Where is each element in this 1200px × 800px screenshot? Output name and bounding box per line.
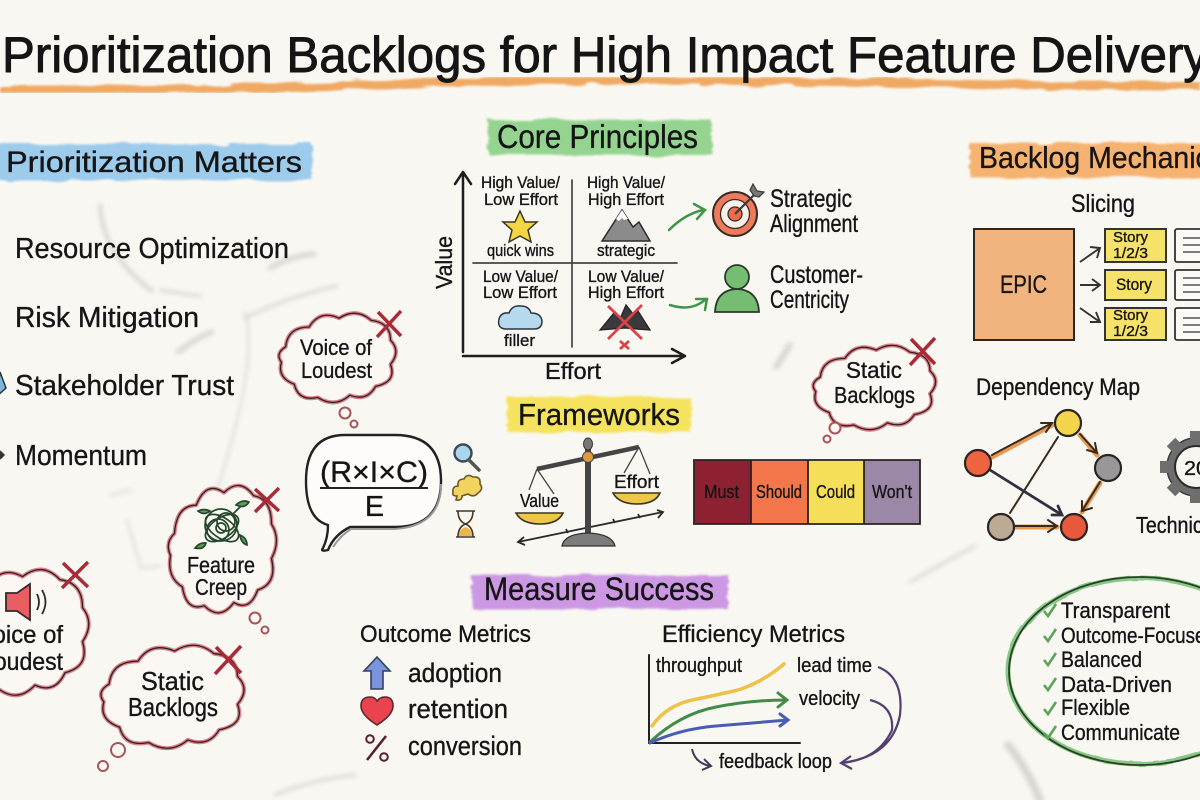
heading: prioritization matters: Prioritization Matters [6, 146, 302, 179]
icon: hourglass [456, 511, 475, 537]
list item: stakeholder trust: Stakeholder Trust [15, 370, 234, 402]
panel: core principles [431, 118, 863, 384]
diagram: slicing: 1/2/3 [1113, 245, 1148, 262]
panel: measure success [360, 571, 901, 773]
anti-pattern cloud: static backlogs, bottom: Backlogs [128, 692, 218, 722]
quadrant: filler: filler [504, 331, 535, 350]
icon: target [713, 184, 764, 236]
quadrant: strategic [587, 173, 665, 260]
formula bubble: rice: E [365, 491, 384, 523]
block: efficiency metrics: feedback loop [719, 751, 832, 773]
anti-pattern cloud: voice of loudest, top: Loudest [301, 358, 372, 383]
diagram: dependency map: Dependency Map [976, 374, 1140, 401]
panel: why prioritization matters [0, 144, 312, 472]
list item: resource optimization: Resource Optimization [15, 233, 289, 265]
chart: moscow bar: Won't [872, 482, 912, 502]
block: outcome metrics: Outcome Metrics [360, 621, 531, 648]
callout: healthy backlog checklist: Data-Driven [1061, 672, 1172, 697]
icon: technical debt gear [1136, 431, 1200, 538]
diagram: slicing: EPIC [1000, 271, 1047, 299]
block: efficiency metrics: lead time [797, 655, 872, 677]
quadrant: filler: Low Value/ [483, 267, 558, 286]
quadrant: quick wins: quick wins [487, 241, 554, 260]
quadrant: strategic: strategic [597, 241, 655, 260]
panel: frameworks [306, 397, 920, 551]
diagram: slicing: Slicing [1071, 190, 1135, 218]
block: outcome metrics [360, 621, 531, 761]
block: efficiency metrics: velocity [799, 688, 860, 710]
arrow: to customer centricity [670, 299, 707, 310]
block: outcome metrics: adoption [408, 658, 502, 688]
heading: frameworks: Frameworks [518, 397, 680, 432]
block: outcome metrics: retention [408, 694, 508, 724]
formula bubble: rice [306, 435, 441, 551]
anti-pattern cloud: static backlogs, top right [813, 338, 936, 442]
chart: moscow bar: Must [704, 482, 739, 502]
diagram: slicing: Story [1116, 275, 1152, 294]
list item: risk mitigation: Risk Mitigation [15, 302, 199, 334]
anti-pattern cloud: static backlogs, top right: Backlogs [834, 382, 915, 408]
anti-pattern cloud: voice of loudest, top [279, 311, 401, 428]
chart: value effort matrix: Effort [545, 358, 602, 384]
quadrant: filler [483, 267, 558, 350]
panel: backlog mechanics [965, 140, 1200, 765]
icon: stakeholder trust [0, 372, 6, 396]
chart: value effort matrix [431, 172, 685, 384]
icon: document cards [1175, 229, 1200, 340]
callout: healthy backlog checklist: Communicate [1061, 720, 1180, 745]
quadrant: low value high effort: Low Value/ [588, 267, 664, 286]
quadrant: quick wins: High Value/ [481, 173, 560, 192]
quadrant: low value high effort [588, 267, 664, 349]
anti-pattern cloud: static backlogs, top right: Static [846, 357, 902, 383]
arrow: to strategic alignment [669, 204, 705, 230]
heading: measure success: Measure Success [484, 571, 714, 607]
heading: core principles: Core Principles [497, 118, 698, 155]
block: efficiency metrics [649, 621, 901, 773]
anti-pattern cloud: feature creep: Creep [195, 574, 247, 600]
quadrant: strategic: High Value/ [587, 173, 665, 192]
quadrant: quick wins: Low Effort [484, 190, 558, 209]
chart: moscow bar: Should [756, 482, 802, 502]
block: outcome metrics: conversion [408, 731, 522, 761]
diagram: dependency map [965, 374, 1140, 540]
anti-pattern cloud: static backlogs, bottom: Static [141, 666, 204, 696]
diagram: slicing: Story [1113, 229, 1148, 246]
anti-pattern cloud: feature creep [168, 486, 279, 634]
chart: moscow bar: Could [816, 482, 855, 502]
block: efficiency metrics: Efficiency Metrics [662, 621, 845, 648]
chart: weighted scale: Value [520, 491, 559, 511]
block: efficiency metrics: throughput [656, 655, 742, 677]
diagram: slicing: 1/2/3 [1113, 323, 1148, 340]
chart: value effort matrix: Value [431, 236, 457, 289]
label: alignment: Alignment [770, 210, 858, 238]
label: strategic alignment: Strategic [770, 185, 852, 213]
quadrant: strategic: High Effort [588, 190, 664, 209]
chart: moscow bar [694, 460, 920, 524]
anti-pattern cloud: feature creep: Feature [187, 552, 255, 578]
diagram: slicing [974, 190, 1200, 340]
callout: healthy backlog checklist: Balanced [1061, 647, 1142, 672]
chart: trends [649, 655, 800, 743]
icon: speaker [6, 584, 46, 620]
icon: people [453, 475, 482, 500]
title: Prioritization Backlogs for High Impact Feature Delivery [2, 27, 1200, 83]
anti-pattern cloud: voice of loudest, left [0, 562, 89, 695]
icon: customer [715, 265, 759, 312]
callout: healthy backlog checklist: Flexible [1061, 695, 1130, 720]
chart: weighted scale [516, 438, 663, 546]
quadrant: quick wins [481, 173, 560, 260]
callout: healthy backlog checklist: Transparent [1061, 598, 1170, 623]
chart: weighted scale: Effort [614, 472, 659, 492]
list item: momentum: Momentum [15, 440, 147, 472]
icon: tangled vine [195, 501, 249, 548]
diagram: slicing: Story [1113, 307, 1148, 324]
quadrant: filler: Low Effort [483, 283, 557, 302]
label: customer: Customer- [770, 261, 863, 289]
label: centricity: Centricity [770, 286, 849, 314]
callout: healthy backlog checklist [1008, 577, 1200, 765]
icon: momentum arrow [0, 451, 4, 459]
quadrant: low value high effort: High Effort [588, 283, 664, 302]
formula bubble: rice: (R×I×C) [320, 456, 428, 489]
icon: magnifier [454, 444, 479, 470]
anti-pattern cloud: static backlogs, bottom [98, 645, 244, 771]
anti-pattern cloud: voice of loudest, top: Voice of [300, 335, 373, 360]
